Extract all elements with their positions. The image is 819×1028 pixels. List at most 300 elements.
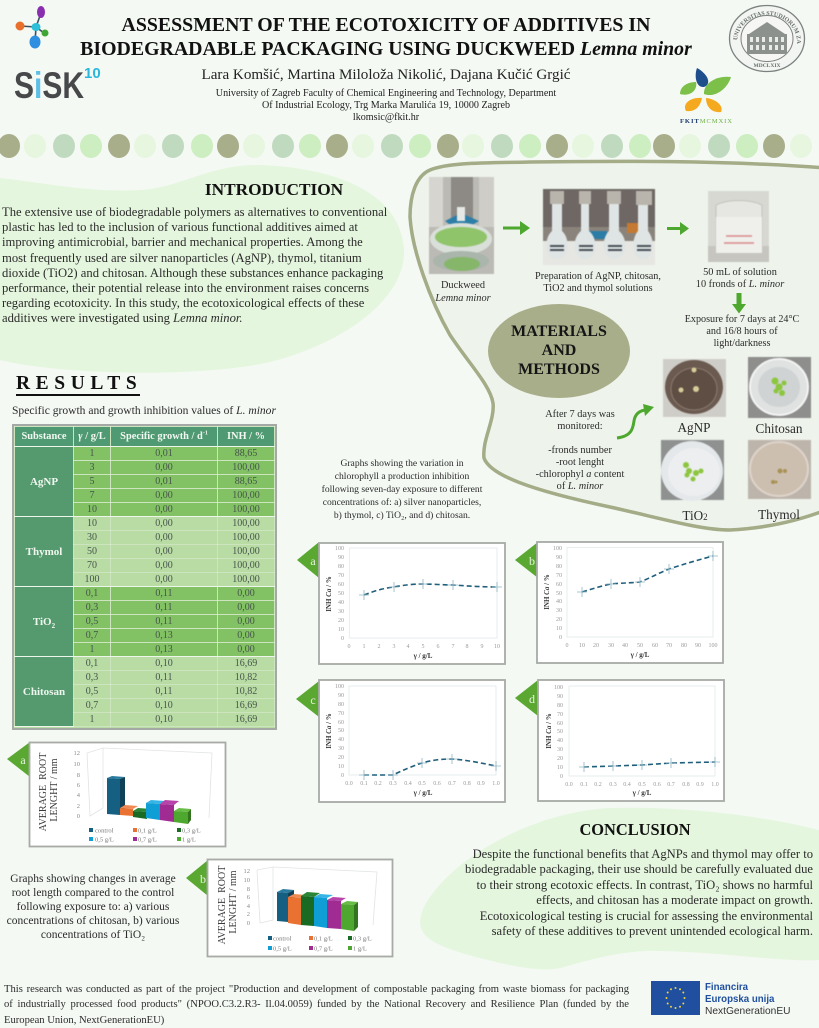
chart c: TiO2: 80 (338, 702, 344, 708)
bar chart a: root length chitosan: LENGHT / mm (49, 758, 60, 822)
chart b: thymol: 30 (556, 608, 562, 614)
table: growth values: 16,69 (235, 658, 257, 668)
chart d: chitosan: 20 (557, 756, 563, 762)
label: TiO2: TiO2 (682, 508, 708, 523)
text: root length graphs description: concentrations of chitosan, b) various (7, 915, 179, 927)
table: growth values: 0,00 (155, 560, 173, 570)
logo: EU funding (651, 981, 791, 1017)
bar chart a: root length chitosan: 0,1 g/L (138, 828, 157, 834)
bar chart b: root length TiO2: 4 (247, 903, 251, 910)
chart b: thymol: 70 (556, 573, 562, 579)
table: growth values: 0,00 (237, 602, 255, 612)
chart a: AgNP: 1 (362, 644, 366, 650)
table: growth values: 0,1 (86, 588, 98, 598)
bar chart b: root length TiO2: 10 (244, 877, 250, 884)
text: root length graphs description: concentrations of TiO₂ (41, 929, 145, 941)
chart a: AgNP: 50 (338, 591, 344, 597)
table: growth values: 10,82 (235, 686, 257, 696)
text: chlorophyll graphs description (322, 458, 482, 521)
chart b: thymol: 20 (593, 643, 599, 649)
text: root length graphs description: following exposure to: a) various (17, 901, 169, 913)
affiliation (216, 88, 556, 123)
chart c: TiO2: 1.0 (492, 781, 500, 787)
bar chart b: root length TiO2: LENGHT / mm (228, 870, 239, 934)
bar chart a: root length chitosan: a (20, 753, 26, 767)
bar chart b: root length TiO2: 8 (247, 886, 250, 893)
chart d: chitosan: 0.2 (594, 782, 602, 788)
chart d: chitosan: 0.1 (580, 782, 588, 788)
chart b: thymol: 10 (579, 643, 585, 649)
text: introduction: regarding ecotoxicity. In this study, the ecotoxicological effects of these (2, 296, 364, 310)
chart a: AgNP: 70 (338, 573, 344, 579)
table: growth values: 0,11 (155, 602, 173, 612)
table: growth values: AgNP (30, 476, 58, 488)
chart d: chitosan: 0.8 (682, 782, 690, 788)
chart a: AgNP: 80 (338, 564, 344, 570)
chart b: thymol: 100 (553, 546, 562, 552)
arrow: solutions to beaker (667, 222, 689, 235)
chart d: chitosan: 70 (557, 712, 563, 718)
heading: materials and methods (488, 304, 630, 398)
bar chart a: root length chitosan: 1 g/L (182, 836, 196, 844)
chart d: chitosan: 0.7 (667, 782, 675, 788)
text: chlorophyll graphs description: b) thymol, c) TiO₂, and d) chitosan. (334, 510, 470, 521)
chart c: TiO2: 0.4 (404, 781, 412, 787)
text: funding acknowledgement: This research was conducted as part of the project "Production and development of compostable packaging from waste biomass for packaging (4, 984, 629, 995)
chart a: AgNP: 10 (494, 644, 500, 650)
chart c: TiO2: 50 (338, 728, 344, 734)
chart a: AgNP: γ / g/L (413, 652, 433, 660)
table: growth values: INH / % (227, 430, 265, 442)
chart b: thymol (515, 541, 724, 664)
table: growth values (12, 424, 277, 730)
photo: AgNP dish (662, 358, 726, 418)
bar chart a: root length chitosan: 4 (77, 792, 81, 799)
chart d: chitosan: 10 (557, 765, 563, 771)
table: growth values: 5 (90, 476, 94, 486)
chart c: TiO2: 0 (341, 773, 344, 779)
chart c: TiO2: 90 (338, 693, 344, 699)
chart c: TiO2: 0.7 (448, 781, 456, 787)
chart b: thymol: 40 (622, 643, 628, 649)
chart c: TiO2: 40 (338, 737, 344, 743)
chart c: TiO2: INH Ca / % (325, 713, 333, 749)
bar chart a: root length chitosan: 12 (74, 750, 80, 757)
chart b: thymol: 20 (556, 617, 562, 623)
table: growth values: 88,65 (235, 476, 257, 486)
table: growth values: 88,65 (235, 448, 257, 458)
bar chart b: root length TiO2: 0,7 g/L (314, 946, 333, 952)
table: growth values: 1 (90, 644, 94, 654)
chart d: chitosan: γ / g/L (632, 789, 652, 797)
table: growth values: 0,11 (155, 672, 173, 682)
text: monitored parameters: After 7 days was (545, 409, 615, 420)
table: growth values: 0,13 (155, 644, 173, 654)
heading: materials and methods: MATERIALS (511, 323, 607, 340)
table: growth values: 0,00 (155, 532, 173, 542)
bar chart b: root length TiO2: 12 (244, 868, 250, 875)
table: growth values: Chitosan (23, 686, 65, 698)
chart d: chitosan: 30 (557, 747, 563, 753)
bar chart a: root length chitosan: control (95, 828, 114, 834)
table: growth values: 100 (84, 574, 100, 584)
text: chlorophyll graphs description: chlorophyll a production inhibition (335, 471, 469, 482)
table: growth values: 16,69 (235, 700, 257, 710)
chart b: thymol: 50 (637, 643, 643, 649)
bar chart b: root length TiO2: 0,3 g/L (353, 936, 372, 942)
chart b: thymol: 100 (708, 643, 718, 649)
text: EU funding label: NextGenerationEU (705, 1006, 791, 1017)
bar chart a: root length chitosan (7, 742, 226, 848)
text: introduction (2, 205, 387, 325)
decorative dot band (0, 134, 812, 158)
caption: exposure: and 16/8 hours of (706, 326, 778, 336)
chart c: TiO2: 0.9 (477, 781, 485, 787)
bar chart b: root length TiO2: 6 (247, 894, 251, 901)
table: growth values: 0,11 (155, 686, 173, 696)
chart a: AgNP: 4 (406, 644, 410, 650)
caption: exposure (685, 314, 799, 348)
chart d: chitosan: 80 (557, 703, 563, 709)
text: introduction: The extensive use of biodegradable polymers as alternatives to conventional (2, 205, 387, 219)
table: growth values: 0,7 (86, 700, 98, 710)
text: monitored parameters: monitored: (557, 421, 603, 432)
text: introduction: performance, their potential release into the environment raises concerns (2, 281, 369, 295)
chart a: AgNP: 7 (452, 644, 454, 650)
icon: university seal (728, 4, 806, 72)
chart c: TiO2: 10 (338, 764, 344, 770)
chart c: TiO2: 0.0 (345, 781, 353, 787)
chart c: TiO2: 0.5 (418, 781, 426, 787)
table: growth values: 100,00 (232, 532, 260, 542)
table: growth values: 0,10 (155, 658, 173, 668)
table: growth values: 0,11 (155, 616, 173, 626)
table caption: Specific growth and growth inhibition values of L. minor (12, 405, 276, 417)
text: conclusion: to their strong ecotoxic effects. In contrast, TiO₂ shows no harmful (477, 878, 813, 892)
chart a: AgNP: 0 (341, 636, 344, 642)
table: growth values: 0,00 (155, 504, 173, 514)
table: growth values: 100,00 (232, 518, 260, 528)
table: growth values: 100,00 (232, 546, 260, 556)
bar chart b: root length TiO2: b (200, 872, 206, 886)
chart c: TiO2: 0.3 (389, 781, 397, 787)
chart b: thymol: γ / g/L (630, 651, 650, 659)
text: monitored parameters: -fronds number (548, 445, 612, 456)
heading: materials and methods: AND (542, 342, 576, 359)
table: growth values: 10,82 (235, 672, 257, 682)
bar chart b: root length TiO2: 0,1 g/L (314, 936, 333, 942)
chart c: TiO2: 100 (335, 684, 344, 690)
chart d: chitosan: 90 (557, 694, 563, 700)
chart c: TiO2: 0.2 (374, 781, 382, 787)
text: introduction: dioxide (TiO2) and chitosan. Although these substances enhance packaging (2, 266, 383, 280)
bar chart b: root length TiO2: 0 (247, 920, 250, 927)
table: growth values: 0,3 (86, 602, 98, 612)
caption: preparation: Preparation of AgNP, chitosan, (535, 271, 661, 282)
table: growth values: 0,7 (86, 630, 98, 640)
bar chart b: root length TiO2: control (273, 936, 292, 942)
table: growth values: 7 (90, 490, 94, 500)
chart a: AgNP: 2 (378, 644, 380, 650)
logo: SISK 10: 10 (84, 65, 101, 82)
chart c: TiO2: 0.6 (433, 781, 441, 787)
chart d: chitosan: 100 (554, 685, 563, 691)
chart a: AgNP: 6 (436, 644, 440, 650)
chart b: thymol: 0 (559, 635, 562, 641)
affiliation: Of Industrial Ecology, Trg Marka Marulića 19, 10000 Zagreb (262, 100, 510, 111)
affiliation: lkomsic@fkit.hr (353, 112, 419, 123)
text: chlorophyll graphs description: concentrations of: a) silver nanoparticles, (323, 497, 481, 508)
table: growth values: 100,00 (232, 574, 260, 584)
chart c: TiO2: 0.8 (463, 781, 471, 787)
text: monitored parameters: of L. minor (557, 481, 603, 492)
chart d: chitosan: 1.0 (711, 782, 719, 788)
table: growth values: 100,00 (232, 560, 260, 570)
arrow: duckweed to solutions (503, 221, 530, 235)
affiliation: University of Zagreb Faculty of Chemical Engineering and Technology, Department (216, 88, 556, 99)
text: EU funding label: Financira (705, 982, 748, 992)
table: growth values: 0,00 (237, 644, 255, 654)
caption: preparation: TiO2 and thymol solutions (543, 283, 653, 294)
arrow: curved to results photos (616, 404, 654, 440)
table: growth values: 0,3 (86, 672, 98, 682)
icon: university seal: MDCLXIX (754, 63, 780, 69)
chart b: thymol: 60 (556, 582, 562, 588)
chart d: chitosan: 50 (557, 729, 563, 735)
label: AgNP: AgNP (678, 420, 710, 435)
text: conclusion: biodegradable packaging, their use should be carefully evaluated due (465, 862, 813, 876)
chart a: AgNP: 90 (338, 555, 344, 561)
photo: beaker (708, 190, 770, 262)
text: monitored parameters: -chlorophyl a content (536, 469, 624, 480)
caption: exposure: Exposure for 7 days at 24°C (685, 314, 799, 324)
table: growth values: 0,01 (155, 448, 173, 458)
chart d: chitosan: d (529, 692, 535, 706)
chart b: thymol: INH Ca / % (543, 574, 551, 610)
chart a: AgNP (297, 542, 506, 665)
title: ASSESSMENT OF THE ECOTOXICITY OF ADDITIVES IN (122, 14, 650, 36)
photo: flasks (542, 188, 656, 265)
text: EU funding label: Europska unija (705, 994, 774, 1005)
bar chart a: root length chitosan: 0,5 g/L (95, 836, 114, 844)
chart c: TiO2: 70 (338, 711, 344, 717)
heading: introduction: INTRODUCTION (205, 180, 343, 199)
bar chart b: root length TiO2: AVERAGE ROOT (217, 866, 228, 944)
table: growth values: 1 (90, 448, 94, 458)
chart d: chitosan: 0.6 (653, 782, 661, 788)
table: growth values: 3 (90, 462, 94, 472)
text: root length graphs description: Graphs showing changes in average (10, 873, 176, 885)
chart a: AgNP: 30 (338, 609, 344, 615)
bar chart b: root length TiO2: 1 g/L (353, 946, 367, 952)
icon: molecule logo (16, 6, 48, 48)
table: growth values: 0,01 (155, 476, 173, 486)
chart a: AgNP: a (310, 554, 316, 568)
table: growth values: 0,00 (155, 462, 173, 472)
chart b: thymol: 80 (556, 564, 562, 570)
table: growth values: Thymol (26, 546, 62, 558)
table: growth values: 0,00 (237, 616, 255, 626)
bar chart a: root length chitosan: AVERAGE ROOT (38, 753, 49, 831)
chart a: AgNP: 8 (466, 644, 468, 650)
bar chart b: root length TiO2: 2 (247, 911, 250, 918)
chart b: thymol: 70 (666, 643, 672, 649)
table: growth values: 1 (90, 714, 94, 724)
table: growth values: 0,13 (155, 630, 173, 640)
table: growth values: γ / g/L (78, 430, 106, 442)
table: growth values: 0,1 (86, 658, 98, 668)
text: root length graphs description: root length compared to the control (12, 887, 174, 899)
caption: duckweed (435, 280, 491, 304)
table: growth values: 16,69 (235, 714, 257, 724)
logo: FKIT: FKITMCMXIX (680, 118, 732, 125)
chart d: chitosan: 0.3 (609, 782, 617, 788)
chart a: AgNP: 5 (422, 644, 424, 650)
chart d: chitosan: 0.5 (638, 782, 646, 788)
table: growth values: 0,00 (237, 630, 255, 640)
chart a: AgNP: 9 (480, 644, 484, 650)
text: chlorophyll graphs description: following seven-day exposure to different (322, 484, 482, 495)
bar chart a: root length chitosan: 0 (77, 813, 80, 820)
chart b: thymol: b (529, 554, 535, 568)
bar chart b: root length TiO2 (186, 858, 394, 958)
logo: SISK 10: SiSK (14, 65, 84, 106)
text: conclusion: safety of these additives to prevent unintended ecological harm. (492, 924, 813, 938)
chart d: chitosan: 0 (560, 774, 563, 780)
caption: duckweed: Duckweed (441, 280, 485, 291)
text: funding acknowledgement: of industrially processed food products" (NPOO.C3.2.R3- Il.04.0059) funded by the National Recovery and Resilience Plan (funded by the (4, 999, 629, 1010)
chart c: TiO2: γ / g/L (413, 789, 433, 797)
chart d: chitosan: 0.9 (696, 782, 704, 788)
chart a: AgNP: INH Ca / % (325, 576, 333, 612)
chart a: AgNP: 3 (392, 644, 396, 650)
table: growth values: 10 (87, 518, 97, 528)
table: growth values: 0,00 (155, 518, 173, 528)
text: conclusion: effects, and chitosan has a moderate impact on growth. (536, 893, 813, 907)
text: EU funding label (705, 982, 791, 1017)
table: growth values: Specific growth / d-1 (120, 430, 208, 442)
chart d: chitosan: INH Ca / % (545, 713, 553, 749)
table: growth values: 0,00 (155, 574, 173, 584)
bar chart a: root length chitosan: 10 (74, 761, 80, 768)
table: growth values: Substance (21, 430, 67, 442)
bar chart a: root length chitosan: 2 (77, 803, 80, 810)
chart b: thymol: 40 (556, 599, 562, 605)
chart b: thymol: 90 (556, 555, 562, 561)
chart c: TiO2: 60 (338, 720, 344, 726)
title (80, 14, 692, 60)
chart b: thymol: 0 (566, 643, 568, 649)
text: introduction: additives were investigated using Lemna minor. (2, 311, 243, 325)
photo: TiO2 dish (660, 439, 725, 501)
chart b: thymol: 10 (556, 626, 562, 632)
text: conclusion: Despite the functional benefits that AgNPs and thymol may offer to (473, 847, 813, 861)
chart a: AgNP: 100 (335, 546, 344, 552)
chart d: chitosan: 60 (557, 721, 563, 727)
table: growth values: 0,10 (155, 714, 173, 724)
text: monitored parameters (536, 409, 624, 492)
caption: solution: 10 fronds of L. minor (696, 279, 784, 290)
text: introduction: improving antimicrobial, barrier and mechanical properties. Among the (2, 235, 363, 249)
caption: exposure: light/darkness (714, 338, 770, 348)
text: root length graphs description (7, 873, 179, 941)
bar chart b: root length TiO2: 0,5 g/L (273, 946, 292, 952)
table: growth values: 0,5 (86, 616, 98, 626)
chart b: thymol: 90 (695, 643, 701, 649)
table: growth values: 50 (87, 546, 97, 556)
chart c: TiO2: 20 (338, 755, 344, 761)
chart d: chitosan: 40 (557, 738, 563, 744)
logo: FKIT (680, 68, 732, 125)
text: monitored parameters: -root lenght (556, 457, 604, 468)
chart a: AgNP: 10 (338, 627, 344, 633)
text: conclusion (465, 847, 813, 938)
text: introduction: most frequently used are silver nanoparticles (AgNP), thymol, titanium (2, 251, 362, 265)
chart c: TiO2 (296, 679, 506, 803)
photo: chitosan dish (747, 356, 812, 419)
table: growth values: TiO2 (33, 616, 55, 630)
chart b: thymol: 50 (556, 591, 562, 597)
table: growth values: 0,00 (155, 490, 173, 500)
label: Thymol: Thymol (758, 507, 800, 522)
text: funding acknowledgement: European Union, NextGenerationEU) (4, 1015, 164, 1026)
table: growth values: 0,5 (86, 686, 98, 696)
heading: materials and methods: METHODS (518, 361, 600, 378)
chart b: thymol: 60 (652, 643, 658, 649)
table: growth values: 10 (87, 504, 97, 514)
text: conclusion: Ecotoxicological testing is crucial for assessing the environmental (480, 909, 813, 923)
chart b: thymol: 30 (608, 643, 614, 649)
chart c: TiO2: 30 (338, 746, 344, 752)
title: BIODEGRADABLE PACKAGING USING DUCKWEED Lemna minor (80, 38, 692, 60)
text: chlorophyll graphs description: Graphs showing the variation in (340, 458, 464, 469)
table: growth values: 0,11 (155, 588, 173, 598)
photo: duckweed (428, 176, 494, 274)
bar chart a: root length chitosan: 6 (77, 782, 81, 789)
bar chart a: root length chitosan: 0,7 g/L (138, 836, 157, 844)
label: Chitosan: Chitosan (756, 421, 802, 436)
table: growth values: 100,00 (232, 504, 260, 514)
chart d: chitosan (515, 679, 725, 802)
caption: solution (696, 267, 784, 290)
chart d: chitosan: 0.0 (565, 782, 573, 788)
table: growth values: 70 (87, 560, 97, 570)
chart b: thymol: 80 (681, 643, 687, 649)
chart c: TiO2: 0.1 (360, 781, 368, 787)
chart a: AgNP: 40 (338, 600, 344, 606)
table: growth values: 0,00 (155, 546, 173, 556)
heading: results: RESULTS (16, 373, 142, 394)
authors: Lara Komšić, Martina Miloloža Nikolić, Dajana Kučić Grgić (202, 67, 570, 83)
heading: conclusion: CONCLUSION (579, 820, 691, 839)
bar chart a: root length chitosan: 0,3 g/L (182, 828, 201, 834)
chart a: AgNP: 20 (338, 618, 344, 624)
bar chart a: root length chitosan: 8 (77, 772, 80, 779)
caption: duckweed: Lemna minor (435, 292, 491, 304)
chart c: TiO2: c (310, 693, 316, 707)
text: introduction: plastic has led to the inclusion of various functional additives aimed at (2, 220, 358, 234)
caption: solution: 50 mL of solution (703, 267, 777, 278)
caption: preparation (535, 271, 661, 294)
table: growth values: 100,00 (232, 462, 260, 472)
icon: EU flag (651, 981, 700, 1015)
arrow: down to exposure (732, 293, 746, 314)
chart d: chitosan: 0.4 (623, 782, 631, 788)
chart a: AgNP: 60 (338, 582, 344, 588)
table: growth values: 0,00 (237, 588, 255, 598)
table: growth values: 0,10 (155, 700, 173, 710)
text: funding acknowledgement (4, 984, 629, 1026)
